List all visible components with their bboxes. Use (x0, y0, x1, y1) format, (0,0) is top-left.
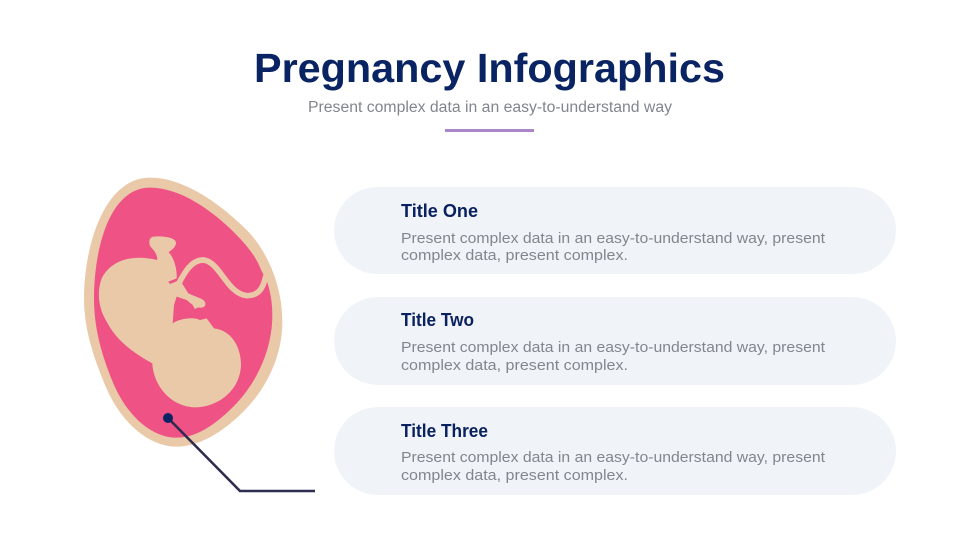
text: title two body: complex data, present complex. (401, 357, 628, 374)
umbilical cord (178, 260, 266, 296)
text: title one body: Present complex data in an easy-to-understand way, present (401, 230, 826, 247)
text: title two body: Present complex data in an easy-to-understand way, present (401, 339, 826, 356)
illustration: fetus in womb (84, 178, 282, 447)
subtitle: Present complex data in an easy-to-understand way (308, 99, 672, 116)
text: title three body: complex data, present complex. (401, 467, 628, 484)
heading underline (445, 129, 534, 132)
panel: title two (334, 297, 896, 385)
fetus silhouette (99, 236, 241, 407)
callout leader line (168, 418, 315, 491)
text: title three body: Present complex data in an easy-to-understand way, present (401, 449, 826, 466)
text: title one body: complex data, present complex. (401, 247, 628, 264)
heading: title three: Title Three (401, 421, 488, 441)
panel: title three (334, 407, 896, 495)
womb interior (94, 188, 272, 438)
heading: title two: Title Two (401, 310, 474, 330)
callout dot (163, 413, 173, 423)
panel: title one (334, 187, 896, 274)
heading: title one: Title One (401, 201, 478, 221)
womb outer wall (84, 178, 282, 447)
title: Pregnancy Infographics (254, 45, 725, 91)
